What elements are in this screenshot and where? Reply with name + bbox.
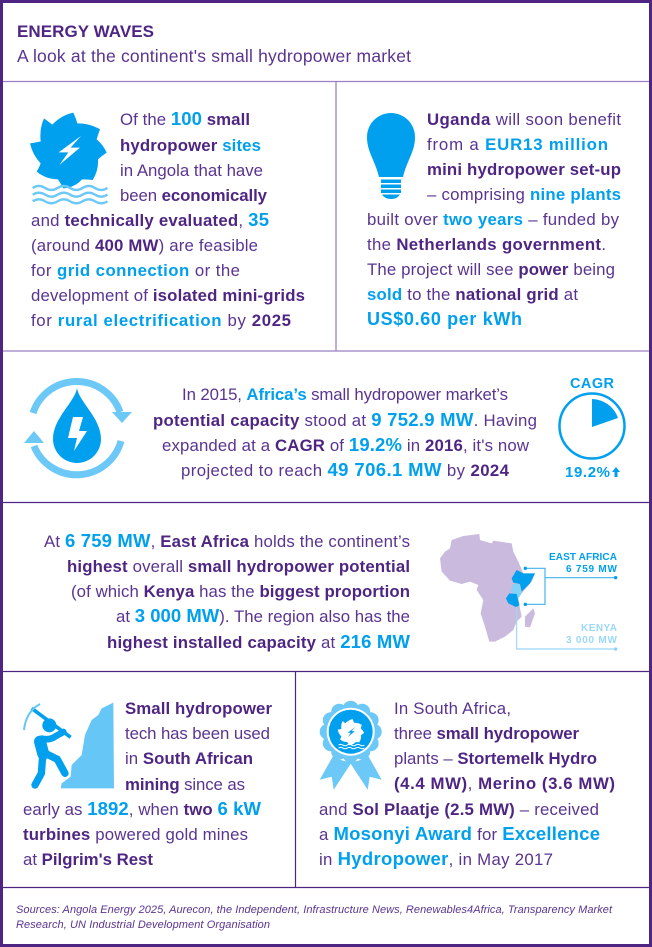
text: Angola sites: for grid connection or the (31, 261, 240, 280)
icon: water drop with arrows (24, 381, 132, 475)
text: East Africa potential: highest overall small hydropower potential (67, 557, 410, 576)
title: ENERGY WAVES (17, 22, 154, 41)
text: Uganda project (367, 110, 621, 329)
text: mining history: in South African (125, 749, 253, 768)
text: mining history: early as 1892, when two 6 kW (23, 798, 262, 819)
text: Uganda project: Uganda will soon benefit (427, 110, 621, 129)
text: Uganda project: the Netherlands government. (367, 235, 606, 254)
label: Kenya: KENYA (581, 623, 617, 634)
panel: Mosonyi Award (319, 699, 615, 869)
label: East Africa: EAST AFRICA (549, 552, 617, 563)
text: Angola sites: and technically evaluated, 35 (31, 209, 269, 230)
label: East Africa (549, 552, 618, 575)
icon: light bulb (367, 113, 415, 199)
text: Uganda project: sold to the national grid at (367, 285, 578, 304)
label: Kenya: 3 000 MW (566, 635, 618, 646)
text: award: and Sol Plaatje (2.5 MW) – received (319, 800, 599, 819)
text: mining history: mining since as (125, 775, 245, 794)
label: Kenya (566, 623, 618, 646)
sources: Research, UN Industrial Development Organisation (16, 919, 270, 931)
text: award: In South Africa, (394, 699, 511, 718)
text: Uganda project: mini hydropower set-up (427, 160, 621, 179)
text: award: three small hydropower (394, 724, 579, 743)
text: Angola sites (31, 108, 305, 330)
text: Angola sites: hydropower sites (120, 136, 261, 155)
panel: Africa market (24, 376, 624, 481)
text: Angola sites: in Angola that have (120, 161, 263, 180)
text: market capacity: potential capacity stood at 9 752.9 MW. Having (153, 409, 537, 430)
text: award: in Hydropower, in May 2017 (319, 848, 553, 869)
text: Uganda project: The project will see power being (367, 260, 615, 279)
sources (16, 904, 613, 931)
panel: Angola (30, 108, 305, 330)
text: Angola sites: Of the 100 small (120, 108, 250, 129)
panel: East Africa (44, 530, 618, 652)
text: East Africa potential (44, 530, 411, 652)
text: East Africa potential: at 3 000 MW). The region also has the (116, 605, 410, 626)
text: Angola sites: been economically (120, 186, 268, 205)
text: mining history: turbines powered gold mines (23, 825, 248, 844)
text: Uganda project: from a EUR13 million (427, 135, 608, 154)
text: Uganda project: built over two years – funded by (367, 210, 620, 229)
text: award (319, 699, 615, 869)
label: East Africa: 6 759 MW (566, 564, 618, 575)
subtitle: A look at the continent's small hydropower market (17, 46, 411, 66)
chart: CAGR pie: 19.2% (565, 464, 610, 481)
header (17, 22, 411, 66)
chart: CAGR pie (560, 376, 624, 481)
text: mining history: at Pilgrim's Rest (23, 850, 153, 869)
text: Angola sites: for rural electrification by 2025 (31, 311, 291, 330)
map: Africa (440, 534, 617, 651)
text: Angola sites: development of isolated mini-grids (31, 286, 305, 305)
text: market capacity (153, 385, 537, 480)
chart: CAGR pie: CAGR (570, 376, 615, 392)
text: award: (4.4 MW), Merino (3.6 MW) (394, 774, 615, 793)
text: East Africa potential: highest installed capacity at 216 MW (107, 631, 411, 652)
text: award: plants – Stortemelk Hydro (394, 749, 597, 768)
text: Angola sites: (around 400 MW) are feasible (31, 236, 258, 255)
text: Uganda project: – comprising nine plants (427, 185, 621, 204)
text: mining history: Small hydropower (125, 699, 272, 718)
text: award: a Mosonyi Award for Excellence (319, 823, 600, 844)
icon: water wheel (30, 113, 107, 203)
text: mining history: tech has been used (125, 724, 270, 743)
icon: award rosette (320, 701, 382, 790)
icon: miner (24, 703, 114, 788)
sources: Sources: Angola Energy 2025, Aurecon, the Independent, Infrastructure News, Renewables4Africa, Transparency Market (16, 904, 613, 916)
text: market capacity: In 2015, Africa’s small hydropower market’s (182, 385, 508, 404)
panel: Uganda (367, 110, 621, 329)
text: market capacity: expanded at a CAGR of 19.2% in 2016, it's now (162, 434, 530, 455)
text: mining history (23, 699, 272, 869)
text: market capacity: projected to reach 49 706.1 MW by 2024 (181, 459, 510, 480)
text: Uganda project: US$0.60 per kWh (367, 309, 522, 329)
text: East Africa potential: (of which Kenya has the biggest proportion (71, 582, 410, 601)
text: East Africa potential: At 6 759 MW, East Africa holds the continent’s (44, 530, 410, 551)
panel: South African mining (23, 699, 272, 869)
